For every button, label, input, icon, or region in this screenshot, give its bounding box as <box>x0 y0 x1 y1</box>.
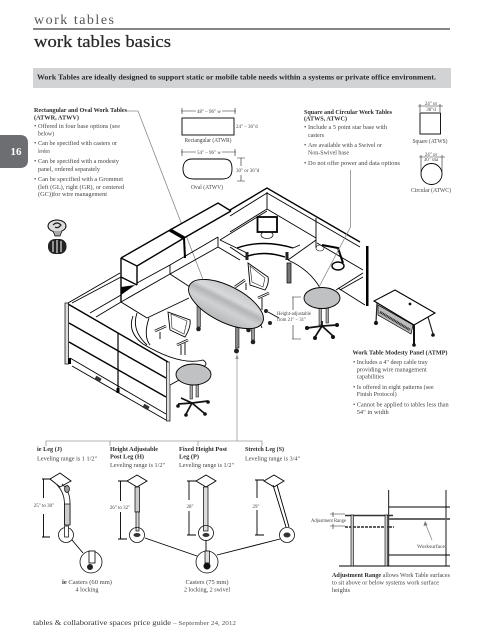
footer <box>33 618 236 627</box>
leg labels: Leveling range is 1/2" <box>179 462 234 469</box>
text block: square and circular work tables: (ATWS, ATWC) <box>304 116 347 122</box>
caster labels: Casters (75 mm) <box>186 579 228 586</box>
page title: work tables basics <box>34 32 171 51</box>
leg labels: Height Adjustable <box>110 446 158 453</box>
intro banner: Work Tables are ideally designed to support static or mobile table needs within a systems or private office environment. <box>37 74 436 82</box>
diagram: circular table <box>411 153 451 194</box>
task chair left <box>155 312 190 355</box>
text block: square and circular work tables: Non-Swivel base <box>308 150 349 156</box>
curved desk wing <box>131 313 206 385</box>
text block: rectangular and oval work tables: • <box>34 123 36 130</box>
leader bracket: table legs <box>46 354 262 446</box>
leader line: square table to round table <box>319 170 350 287</box>
text block: modesty panel: Work Table Modesty Panel (ATMP) <box>352 350 448 356</box>
leg labels: Stretch Leg (S) <box>245 446 284 453</box>
caster labels: ie Casters (60 mm) <box>62 579 112 586</box>
page number tab <box>0 135 28 168</box>
task lamp <box>316 245 344 270</box>
text block: adjustment range: Adjustment Range allows Work Table surfaces <box>332 572 450 579</box>
text block: modesty panel: Is offered in eight patterns (see <box>357 384 434 391</box>
diagram: circular table: Circular (ATWC) <box>411 187 451 194</box>
text block: rectangular and oval work tables <box>34 107 127 198</box>
diagram: oval table dimensions <box>181 149 260 191</box>
text block: rectangular and oval work tables: Can be specified with a modesty <box>38 158 120 165</box>
height-adjustable dimension: from 21" – 31" <box>277 318 306 323</box>
text block: modesty panel: Cannot be applied to tables less than <box>357 402 449 408</box>
diagram: fixed height post leg: 28" <box>186 505 194 510</box>
diagram: height adjustable post leg: 26" to 32" <box>110 506 130 511</box>
text block: rectangular and oval work tables: Can be specified with a Grommet <box>38 176 123 183</box>
text block: rectangular and oval work tables: panel, ordered separately <box>38 166 101 173</box>
diagram: ie leg: 25" to 30" <box>34 504 54 509</box>
diagram: circular table: 30" dia <box>424 158 439 163</box>
text block: rectangular and oval work tables: Rectangular and Oval Work Tables <box>34 107 127 114</box>
leg labels: Leveling range is 1/2" <box>110 462 165 469</box>
diagram: oval table dimensions: 30" or 36"d <box>236 169 260 174</box>
round stool right <box>304 288 340 340</box>
text block: rectangular and oval work tables: (ATWR, ATWV) <box>34 114 79 122</box>
text block: square and circular work tables: Do not offer power and data options <box>308 160 400 167</box>
section heading: work tables <box>34 13 114 28</box>
diagram: adjustment range <box>311 490 450 566</box>
text block: modesty panel: Includes a 4" deep cable tray <box>357 359 428 366</box>
leg labels: Leveling range is 3/4" <box>245 456 300 462</box>
height-adjustable dimension: Height-adjustable <box>277 312 312 317</box>
diagram: square table: 30"d <box>426 108 436 113</box>
footer: – September 24, 2012 <box>172 620 236 627</box>
diagram: circular table: 24" or <box>425 153 438 158</box>
text block: adjustment range: to sit above or below systems work surface <box>332 580 439 586</box>
overhead storage bin <box>68 203 231 317</box>
diagram: oval table dimensions: Oval (ATWV) <box>191 184 223 191</box>
text block: modesty panel: capabilities <box>357 374 385 380</box>
right panel <box>316 218 368 306</box>
diagram: square table <box>412 102 448 145</box>
caster labels: 4 locking <box>76 586 99 594</box>
text block: rectangular and oval work tables: below) <box>38 130 54 138</box>
diagram: ie leg <box>34 473 102 573</box>
height-adjustable dimension <box>277 297 312 339</box>
diagram: adjustment range: Adjustment Range <box>311 519 347 524</box>
leg labels: Leveling range is 1 1/2" <box>37 456 97 462</box>
diagram: stretch leg: 29" <box>252 505 260 510</box>
diagram: square table: 24" or <box>425 102 438 107</box>
text block: square and circular work tables: Include a 5 point star base with <box>308 124 388 131</box>
diagram: rectangular table dimensions: 48" – 96" w <box>197 110 221 115</box>
leg labels: Leg (P) <box>179 454 199 460</box>
page number tab: 16 <box>10 146 22 158</box>
text block: square and circular work tables: • <box>304 142 306 149</box>
leg labels <box>37 446 300 469</box>
text block: square and circular work tables: Square and Circular Work Tables <box>304 109 392 116</box>
monitor and arc desk <box>230 217 320 288</box>
text block: modesty panel: providing wire management <box>357 366 427 374</box>
diagram: square table: Square (ATWS) <box>412 138 448 145</box>
text block: rectangular and oval work tables: Offered in four base options (see <box>38 123 120 130</box>
illustration: modesty panel table <box>374 290 435 347</box>
front left panel <box>65 303 170 421</box>
illustration: workstation with work tables <box>65 188 368 421</box>
text block: rectangular and oval work tables: (left (GL), right (GR), or centered <box>38 184 125 191</box>
diagram: height adjustable post leg <box>110 475 147 542</box>
text block: modesty panel <box>352 350 449 416</box>
text block: rectangular and oval work tables: (GC))for wire management <box>38 191 107 198</box>
text block: square and circular work tables: Are available with a Swivel or <box>308 142 383 149</box>
diagram: rectangular table dimensions: 24" – 36"d <box>236 125 258 130</box>
text block: square and circular work tables: • <box>304 160 306 167</box>
text block: rectangular and oval work tables: Can be specified with casters or <box>38 140 118 147</box>
diagram: caster detail <box>145 538 280 573</box>
icon: grommet <box>48 220 66 254</box>
diagram: fixed height post leg <box>186 475 216 553</box>
leg labels: Post Leg (H) <box>110 454 144 460</box>
text block: square and circular work tables <box>304 109 400 167</box>
oval meeting table <box>181 269 271 354</box>
text block: rectangular and oval work tables: • <box>34 158 36 165</box>
text block: adjustment range <box>332 572 450 594</box>
leader line: rectangular table to oval table <box>127 111 204 282</box>
text block: rectangular and oval work tables: • <box>34 176 36 183</box>
round stool left <box>176 364 211 417</box>
diagram: adjustment range: Worksurface <box>417 545 446 550</box>
back panels <box>121 188 360 318</box>
text block: square and circular work tables: • <box>304 124 306 131</box>
text block: square and circular work tables: casters <box>308 132 324 139</box>
leg labels: Fixed Height Post <box>179 446 228 453</box>
footer: tables & collaborative spaces price guide <box>33 618 172 627</box>
caster labels: 2 locking, 2 swivel <box>184 586 230 594</box>
text block: modesty panel: • <box>353 359 355 366</box>
diagram: rectangular table dimensions <box>181 108 258 144</box>
task chair right <box>235 263 279 328</box>
text block: modesty panel: • <box>353 402 355 408</box>
text block: modesty panel: • <box>353 384 355 391</box>
text block: modesty panel: Finish Protocol) <box>357 391 397 398</box>
diagram: oval table dimensions: 54" – 96" w <box>197 151 221 156</box>
diagram: rectangular table dimensions: Rectangular (ATWR) <box>184 137 232 144</box>
text block: adjustment range: heights <box>332 587 350 594</box>
text block: modesty panel: 54" in width <box>357 409 389 416</box>
text block: rectangular and oval work tables: • <box>34 140 36 147</box>
text block: rectangular and oval work tables: levelers <box>38 148 50 155</box>
caster labels <box>62 579 230 594</box>
intro banner <box>33 68 451 88</box>
diagram: stretch leg <box>252 475 294 542</box>
leg labels: ie Leg (J) <box>37 446 62 453</box>
